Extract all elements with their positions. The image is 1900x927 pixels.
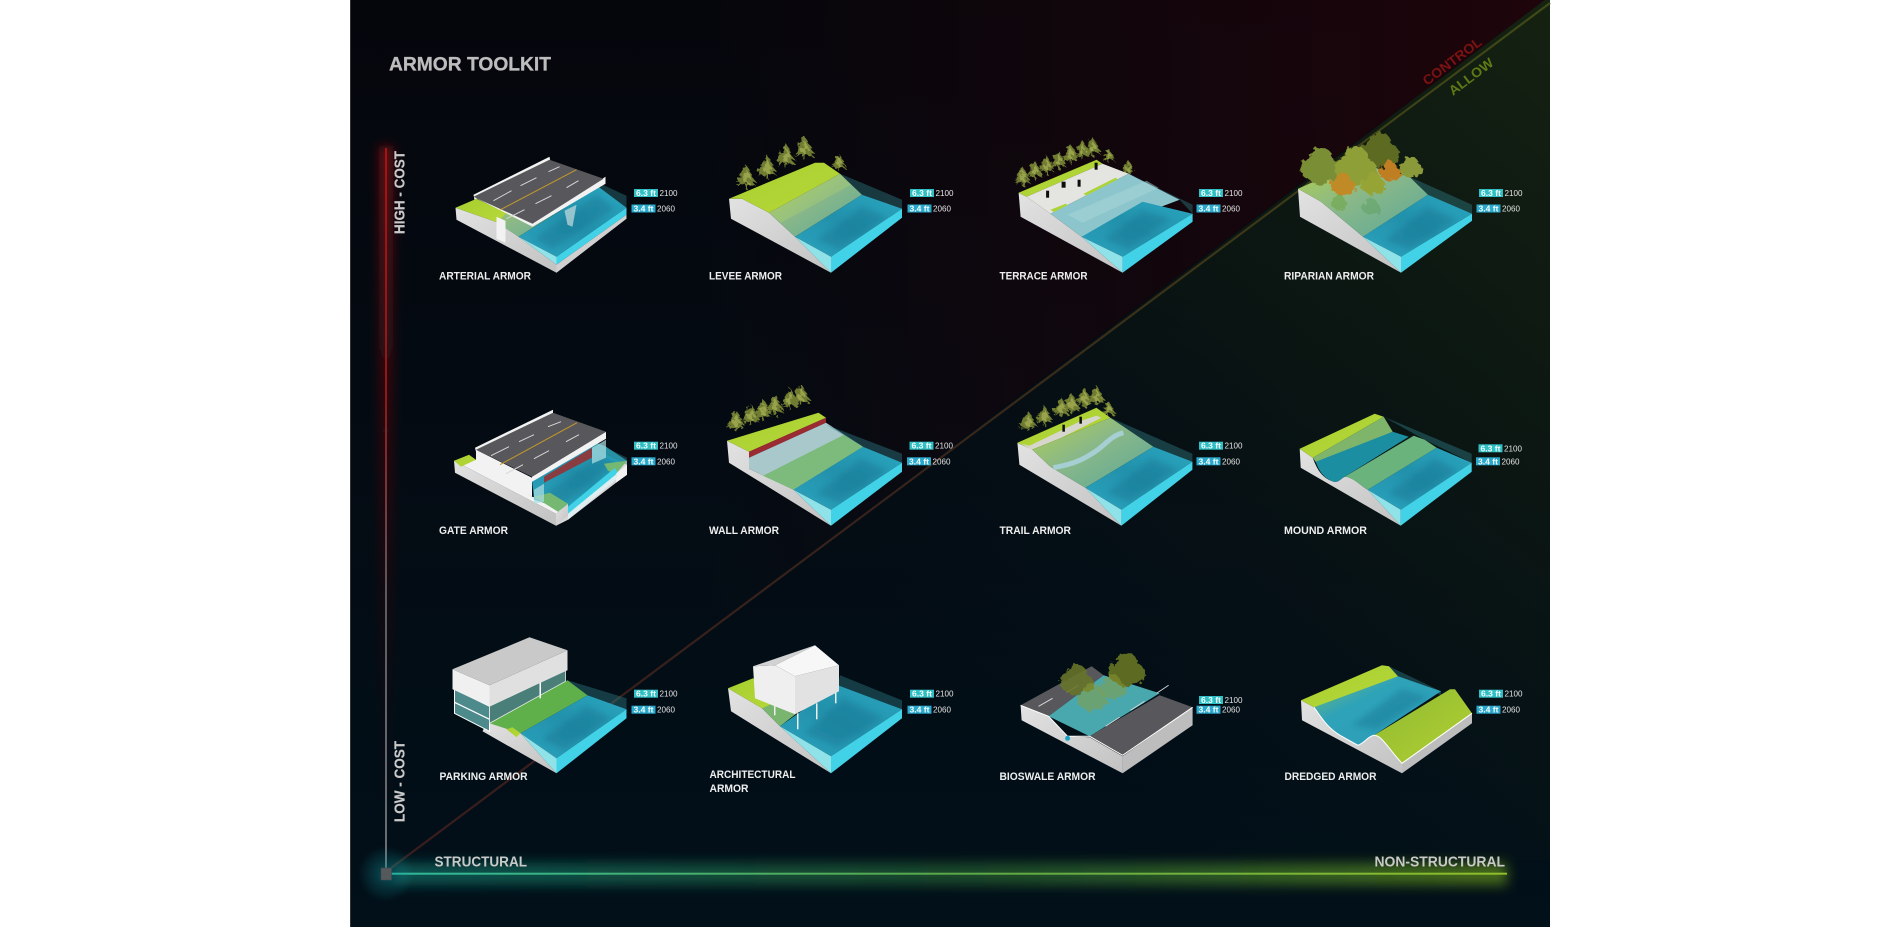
- label: trail armor: TRAIL ARMOR: [1000, 525, 1071, 537]
- depth tags: arterial: 2060: [657, 204, 675, 214]
- people: [1062, 417, 1082, 432]
- axis origin marker: [358, 846, 414, 902]
- label: wall armor: WALL ARMOR: [709, 525, 779, 537]
- label: bioswale armor: BIOSWALE ARMOR: [1000, 771, 1096, 783]
- depth tags: gate: 2060: [657, 456, 675, 466]
- depth tags: trail: 3.4 ft: [1198, 456, 1219, 466]
- depth tags: trail: 2100: [1224, 441, 1243, 451]
- label: allow: ALLOW: [1446, 55, 1497, 98]
- title: ARMOR TOOLKIT: [389, 54, 551, 76]
- road deck: [475, 410, 606, 482]
- depth tags: riparian: 3.4 ft: [1478, 204, 1499, 214]
- trees: [1020, 385, 1115, 432]
- label: parking armor: PARKING ARMOR: [440, 771, 528, 783]
- horizontal axis: structural to non-structural: [391, 863, 1507, 885]
- depth tags: trail: 6.3 ft: [1201, 441, 1221, 451]
- depth tags: riparian: 6.3 ft: [1481, 188, 1501, 198]
- house: [753, 645, 839, 714]
- depth tags: arterial: 2100: [660, 188, 678, 198]
- diagram: parking armor: [452, 637, 626, 773]
- label: control: CONTROL: [1420, 34, 1485, 88]
- road deck: [474, 157, 606, 227]
- trees: [736, 136, 846, 189]
- depth tags: terrace: 2060: [1222, 204, 1240, 214]
- depth tags: parking: 3.4 ft: [634, 705, 654, 715]
- depth tags: parking: 2100: [660, 689, 678, 699]
- depth tags: gate: 3.4 ft: [634, 456, 654, 466]
- depth tags: wall: 6.3 ft: [912, 441, 932, 451]
- trees: [1015, 138, 1135, 186]
- depth tags: trail: [1196, 441, 1243, 466]
- label: terrace armor: TERRACE ARMOR: [1000, 270, 1088, 282]
- label: mound armor: MOUND ARMOR: [1284, 525, 1367, 537]
- depth tags: terrace: 6.3 ft: [1201, 188, 1221, 198]
- depth tags: riparian: 2060: [1502, 204, 1520, 214]
- depth tags: riparian: 2100: [1504, 188, 1523, 198]
- depth tags: parking: [632, 689, 678, 715]
- diagram: mound armor: [1300, 414, 1472, 526]
- depth tags: terrace: [1196, 188, 1243, 214]
- label: riparian armor: RIPARIAN ARMOR: [1284, 270, 1374, 282]
- depth tags: dredged: 3.4 ft: [1478, 705, 1499, 715]
- depth tags: riparian: [1476, 188, 1523, 214]
- depth tags: architectural: [908, 689, 954, 715]
- depth tags: levee: [908, 188, 954, 214]
- depth tags: wall: 2060: [932, 456, 951, 466]
- depth tags: dredged: 6.3 ft: [1481, 689, 1501, 699]
- bioswale trees: [1060, 653, 1145, 712]
- diagram: trail armor: [1017, 385, 1192, 526]
- axis label: low cost: LOW - COST: [392, 741, 408, 822]
- depth tags: arterial: [632, 188, 678, 214]
- depth tags: mound: 2100: [1504, 443, 1522, 453]
- diagram: gate armor: [454, 410, 627, 526]
- depth tags: mound: 3.4 ft: [1478, 456, 1498, 466]
- depth tags: wall: 2100: [935, 441, 953, 451]
- depth tags: mound: [1476, 443, 1522, 466]
- building: [452, 637, 568, 731]
- vertical axis: cost: [379, 146, 393, 875]
- depth tags: architectural: 2100: [936, 689, 954, 699]
- diagram: bioswale armor: [1021, 653, 1193, 773]
- diagram: arterial armor: [456, 157, 626, 273]
- label: gate armor: GATE ARMOR: [439, 525, 508, 537]
- label: arterial armor: ARTERIAL ARMOR: [439, 270, 531, 282]
- axis label: high cost: HIGH - COST: [392, 151, 408, 234]
- depth tags: gate: 2100: [660, 441, 678, 451]
- label: architectural armor: ARCHITECTURAL: [710, 769, 796, 781]
- depth tags: levee: 6.3 ft: [912, 188, 932, 198]
- axis label: non-structural: NON-STRUCTURAL: [1374, 854, 1505, 870]
- depth tags: arterial: 6.3 ft: [636, 188, 656, 198]
- label: architectural armor: ARMOR: [710, 783, 749, 795]
- label: architectural armor: [710, 769, 796, 795]
- depth tags: parking: 2060: [657, 705, 675, 715]
- dark panel background: [350, 0, 1550, 927]
- diagram: architectural armor: [728, 645, 902, 773]
- depth tags: wall: [907, 441, 953, 466]
- diagram: wall armor: [727, 384, 902, 526]
- diagram: riparian armor: [1298, 132, 1472, 273]
- diagram: dredged armor: [1301, 665, 1472, 773]
- depth tags: arterial: 3.4 ft: [634, 204, 654, 214]
- depth tags: terrace: 3.4 ft: [1198, 204, 1219, 214]
- depth tags: bioswale: 3.4 ft: [1198, 705, 1219, 715]
- depth tags: gate: 6.3 ft: [636, 441, 656, 451]
- depth tags: levee: 2100: [936, 188, 954, 198]
- depth tags: terrace: 2100: [1224, 188, 1243, 198]
- people: [1046, 163, 1098, 198]
- depth tags: levee: 2060: [933, 204, 951, 214]
- depth tags: architectural: 3.4 ft: [910, 705, 930, 715]
- depth tags: parking: 6.3 ft: [636, 689, 656, 699]
- label: levee armor: LEVEE ARMOR: [709, 270, 782, 282]
- depth tags: mound: 6.3 ft: [1480, 443, 1501, 453]
- depth tags: dredged: 2100: [1504, 689, 1523, 699]
- trees: [727, 384, 810, 432]
- depth tags: mound: 2060: [1502, 456, 1520, 466]
- depth tags: bioswale: 2060: [1222, 705, 1240, 715]
- label: dredged armor: DREDGED ARMOR: [1284, 771, 1377, 783]
- depth tags: architectural: 2060: [933, 705, 951, 715]
- depth tags: bioswale: 2100: [1224, 695, 1243, 705]
- depth tags: architectural: 6.3 ft: [912, 689, 932, 699]
- depth tags: dredged: 2060: [1502, 705, 1520, 715]
- depth tags: wall: 3.4 ft: [909, 456, 929, 466]
- depth tags: bioswale: [1196, 695, 1243, 715]
- depth tags: bioswale: 6.3 ft: [1201, 695, 1221, 705]
- axis label: structural: STRUCTURAL: [434, 854, 527, 870]
- diagram: levee armor: [729, 136, 902, 273]
- depth tags: dredged: [1476, 689, 1523, 715]
- diagram: terrace armor: [1015, 138, 1193, 273]
- stilts: [774, 691, 836, 729]
- diagonal control / allow divider: [391, 3, 1550, 868]
- depth tags: trail: 2060: [1222, 456, 1240, 466]
- riparian trees: [1301, 132, 1423, 215]
- depth tags: levee: 3.4 ft: [910, 204, 930, 214]
- depth tags: gate: [632, 441, 678, 466]
